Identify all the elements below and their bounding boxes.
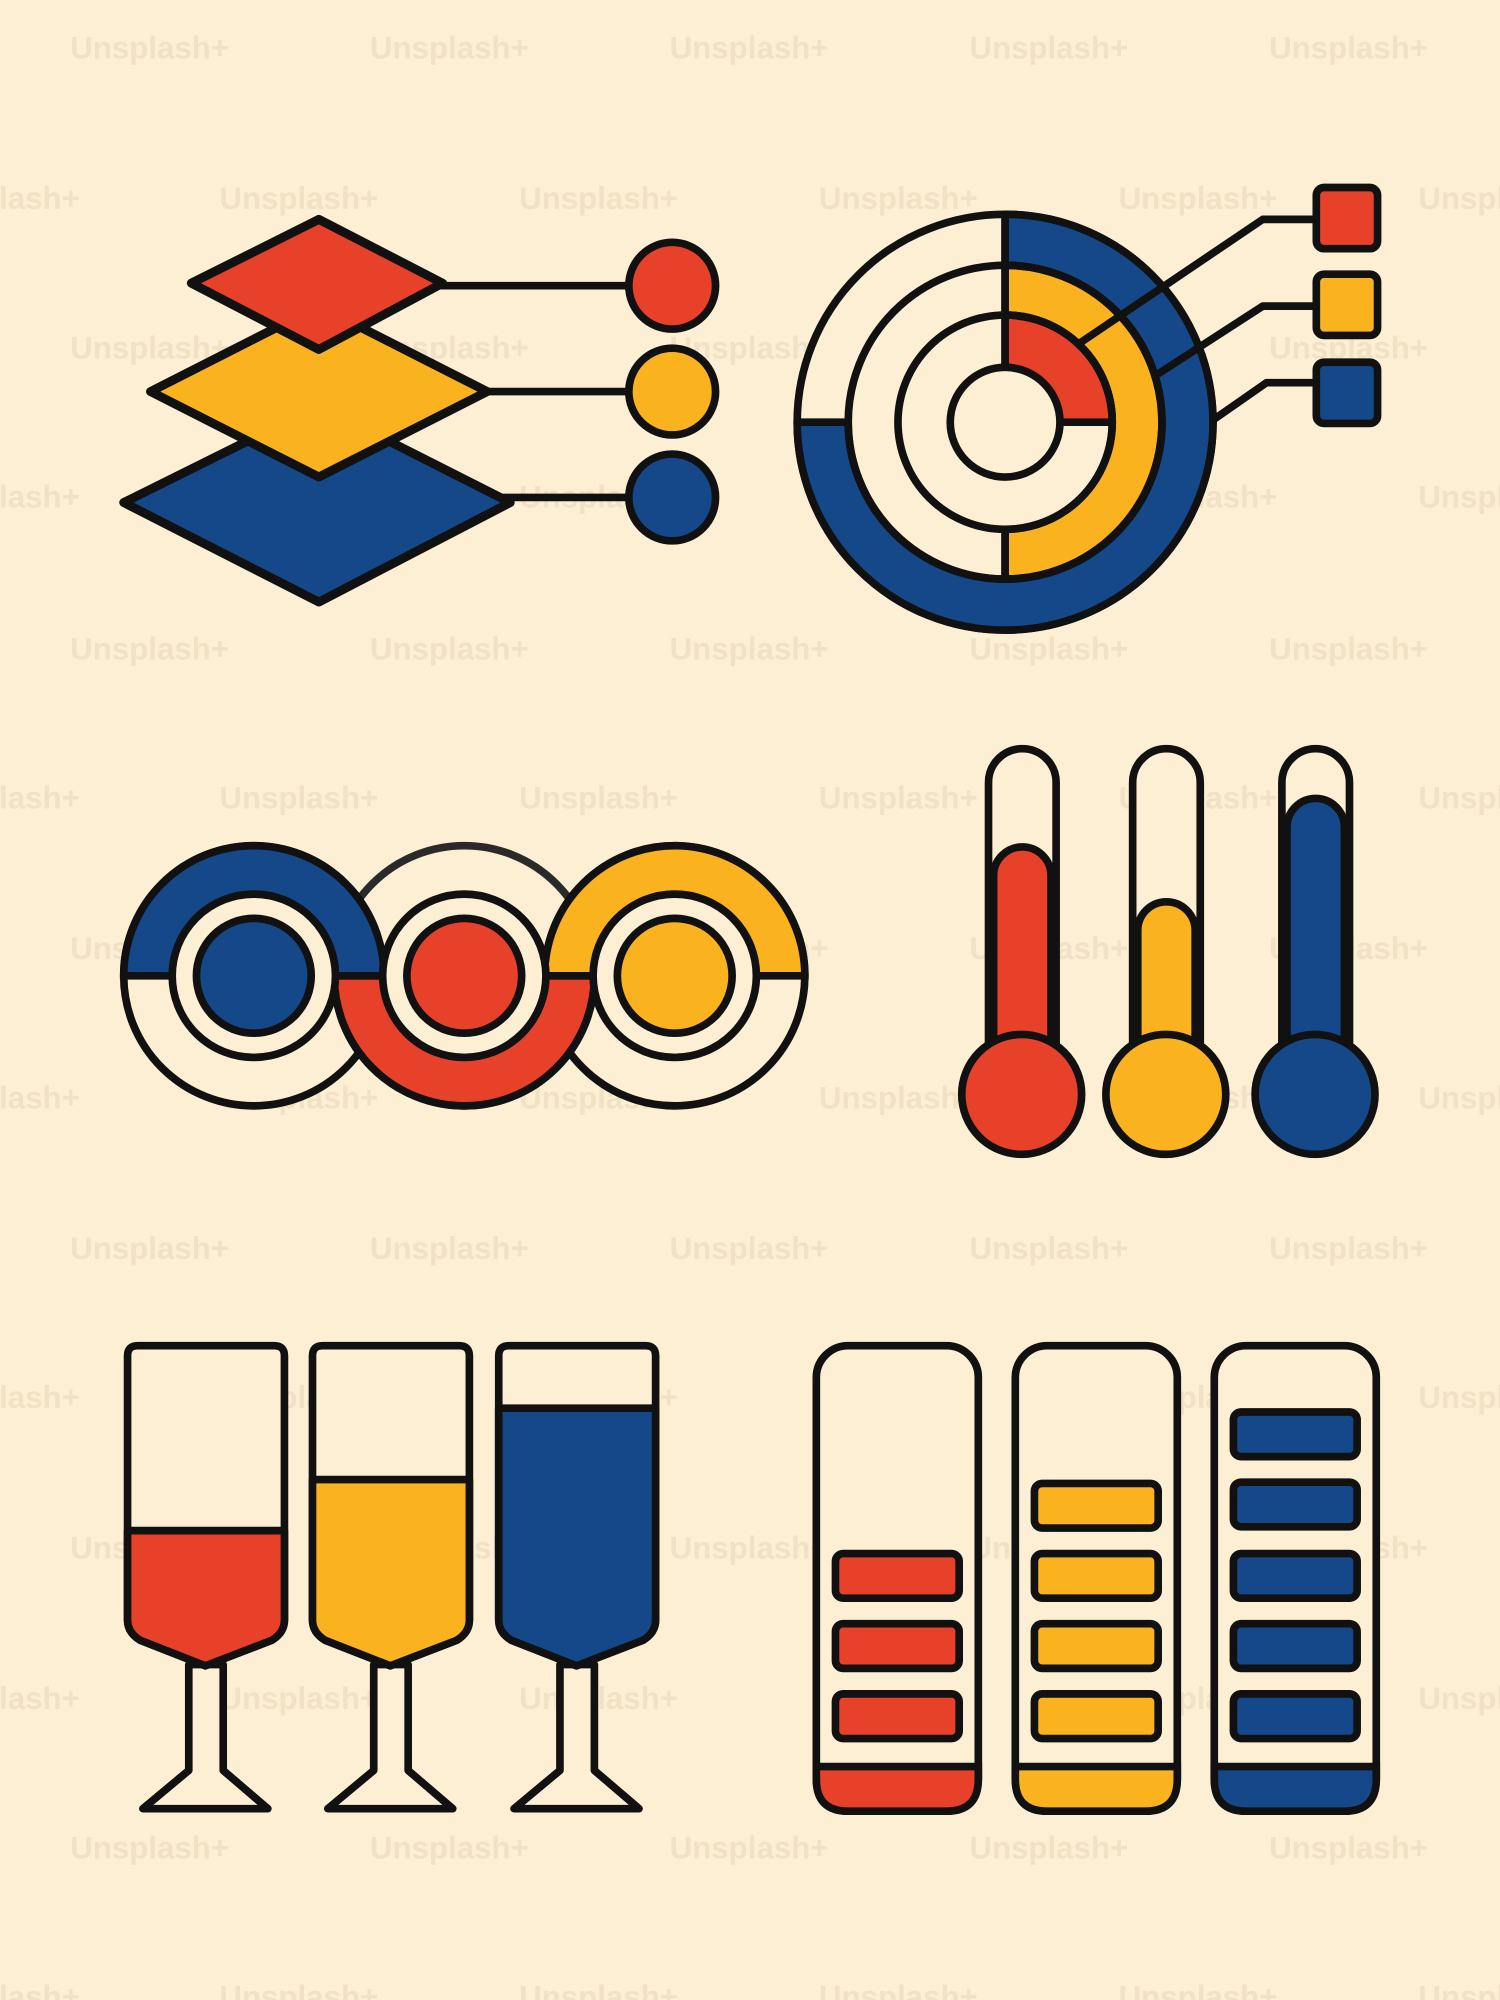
text: Unsplash+ [670,1231,829,1266]
text: Unsplash+ [370,330,529,365]
text: Unsplash+ [1269,1830,1428,1865]
connectors [1078,219,1316,344]
diamond: blue [124,406,510,602]
legend squares [1316,188,1378,249]
glass: blue [499,1346,656,1809]
text: Unsplash+ [1119,781,1278,816]
text: Unsplash+ [670,931,829,966]
text: Unsplash+ [219,781,378,816]
panel: thermometers [962,749,1375,1154]
text: Unsplash+ [1119,1380,1278,1415]
text: Unsplash+ [1119,1080,1278,1115]
panel: target ring chart [797,188,1378,630]
column: yellow [1015,1346,1177,1811]
text: Unsplash+ [969,631,1128,666]
text: Unsplash+ [70,31,229,66]
text: Unsplash+ [1269,330,1428,365]
text: Unsplash+ [370,1830,529,1865]
text: Unsplash+ [70,1830,229,1865]
text: Unsplash+ [819,1080,978,1115]
text: Unsplash+ [370,631,529,666]
diamond: yellow [151,306,487,477]
text: Unsplash+ [819,480,978,515]
text: Unsplash+ [219,480,378,515]
text: Unsplash+ [370,1531,529,1566]
circle: red [629,242,716,329]
text: Unsplash+ [1119,181,1278,216]
text: Unsplash+ [969,1830,1128,1865]
text: Unsplash+ [969,31,1128,66]
text: Unsplash+ [670,330,829,365]
panel: glasses [128,1346,656,1809]
text: Unsplash+ [70,631,229,666]
text: Unsplash+ [370,1231,529,1266]
text: Unsplash+ [969,330,1128,365]
text: Unsplash+ [1119,480,1278,515]
text: Unsplash+ [219,181,378,216]
column: red [816,1346,978,1811]
text: Unsplash+ [819,781,978,816]
text: Unsplash+ [219,1681,378,1716]
text: Unsplash+ [819,1380,978,1415]
text: Unsplash+ [1269,31,1428,66]
text: Unsplash+ [1119,1681,1278,1716]
glass: yellow [312,1346,469,1809]
text: Unsplash+ [70,1531,229,1566]
text: Unsplash+ [969,1531,1128,1566]
text: Unsplash+ [370,31,529,66]
text: Unsplash+ [969,1231,1128,1266]
text: Unsplash+ [1269,1231,1428,1266]
text: Unsplash+ [670,631,829,666]
thermometer: red [962,749,1082,1154]
text: Unsplash+ [1269,931,1428,966]
diamond: red [191,219,443,349]
circle: yellow [629,348,716,435]
text: Unsplash+ [70,330,229,365]
text: Unsplash+ [70,931,229,966]
text: Unsplash+ [1269,631,1428,666]
circle: blue [629,454,716,541]
text: Unsplash+ [519,1080,678,1115]
text: Unsplash+ [219,1080,378,1115]
text: Unsplash+ [219,1380,378,1415]
thermometer: yellow [1106,749,1226,1154]
text: Unsplash+ [519,480,678,515]
text: Unsplash+ [670,31,829,66]
text: Unsplash+ [519,781,678,816]
text: Unsplash+ [670,1531,829,1566]
thermometer: blue [1255,749,1375,1154]
text: Unsplash+ [519,1380,678,1415]
text: Unsplash+ [819,1681,978,1716]
text: Unsplash+ [370,931,529,966]
glass: red [128,1346,284,1809]
panel: layered diamonds [124,219,716,602]
text: Unsplash+ [670,1830,829,1865]
text: Unsplash+ [819,181,978,216]
text: Unsplash+ [1269,1531,1428,1566]
panel: interlocking circles [124,846,805,1106]
text: Unsplash+ [70,1231,229,1266]
text: Unsplash+ [969,931,1128,966]
panel: battery bars [816,1346,1376,1811]
text: Unsplash+ [519,181,678,216]
text: Unsplash+ [519,1681,678,1716]
column: blue [1214,1346,1376,1811]
